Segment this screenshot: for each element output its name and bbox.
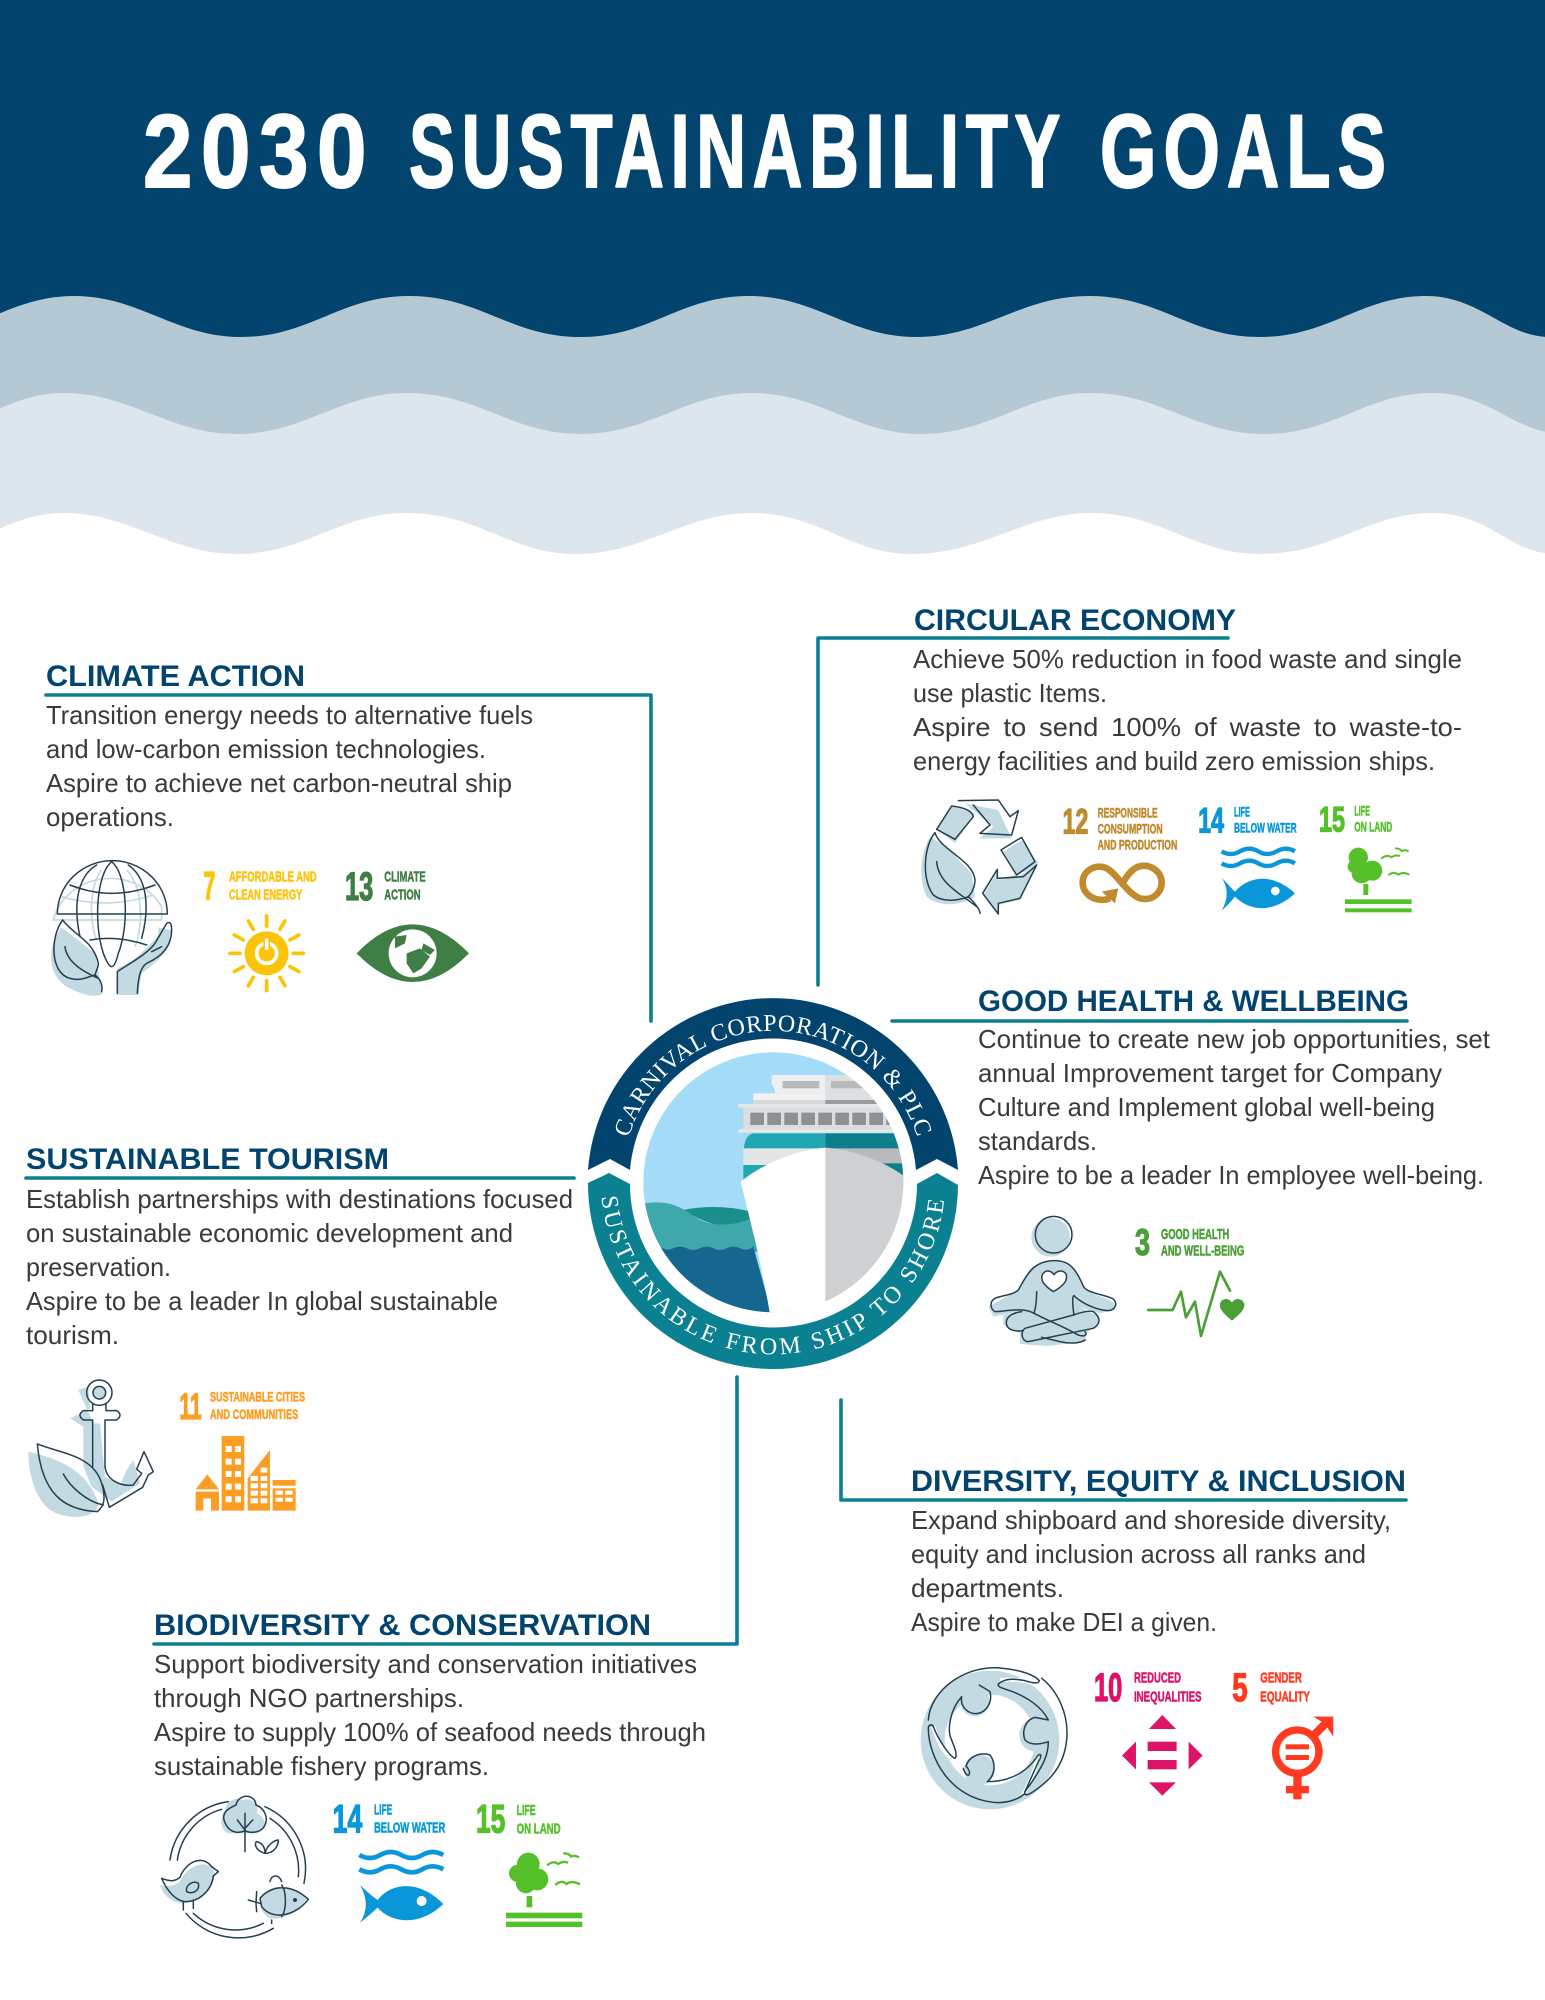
SDG 15 badge bbox=[476, 1798, 582, 1927]
title: GOALS bbox=[1100, 94, 1393, 210]
SDG 12 badge bbox=[1063, 802, 1177, 903]
text: sustainable tourism: preservation. bbox=[26, 1252, 171, 1282]
heading: climate action: CLIMATE ACTION bbox=[46, 660, 305, 693]
icon: globe in hands with leaf bbox=[51, 861, 172, 996]
connector: good health bbox=[892, 1019, 1407, 1023]
text: sustainable tourism: on sustainable economic development and bbox=[26, 1218, 513, 1248]
heading: sustainable tourism: SUSTAINABLE TOURISM bbox=[26, 1143, 389, 1176]
SDG 10 badge: INEQUALITIES bbox=[1134, 1689, 1202, 1705]
ribbon text: top: CARNIVAL CORPORATION & PLC bbox=[616, 1015, 932, 1136]
text: good health: Aspire to be a leader In employee well-being. bbox=[978, 1160, 1484, 1190]
text: good health bbox=[978, 1024, 1491, 1190]
SDG 11 badge: AND COMMUNITIES bbox=[210, 1407, 298, 1422]
heading: circular economy: CIRCULAR ECONOMY bbox=[914, 604, 1236, 637]
SDG 12 badge: AND PRODUCTION bbox=[1098, 837, 1177, 852]
text: circular economy: Achieve 50% reduction in food waste and single bbox=[913, 644, 1462, 674]
icon: anchor with leaf bbox=[28, 1380, 153, 1517]
SDG 14 badge: LIFE bbox=[374, 1802, 392, 1818]
SDG 15 badge: ON LAND bbox=[517, 1821, 561, 1837]
SDG 5 badge bbox=[1232, 1666, 1333, 1799]
SDG 5 badge: EQUALITY bbox=[1260, 1689, 1310, 1705]
SDG 15 badge bbox=[1319, 801, 1412, 912]
text: good health: Culture and Implement global well-being bbox=[978, 1092, 1435, 1122]
wave layer: pale blue bbox=[0, 393, 1545, 620]
text: diversity bbox=[911, 1505, 1391, 1637]
SDG 13 badge: ACTION bbox=[384, 888, 421, 904]
SDG 15 badge: 15 bbox=[476, 1798, 505, 1842]
SDG 15 badge: LIFE bbox=[1354, 803, 1370, 818]
text: sustainable tourism: tourism. bbox=[26, 1320, 119, 1350]
SDG 15 badge: 15 bbox=[1319, 801, 1345, 840]
SDG 10 badge: 10 bbox=[1094, 1666, 1122, 1710]
SDG 7 badge: 7 bbox=[203, 864, 215, 908]
text: sustainable tourism: Aspire to be a leader In global sustainable bbox=[26, 1286, 498, 1316]
SDG 5 badge: 5 bbox=[1232, 1666, 1248, 1710]
icon: meditating figure with heart bbox=[988, 1216, 1116, 1346]
text: circular economy: Aspire to send 100% of waste to waste-to- bbox=[913, 712, 1462, 742]
panel: diversity, equity and inclusion bbox=[911, 1465, 1406, 1803]
text: diversity: Aspire to make DEI a given. bbox=[911, 1607, 1217, 1637]
SDG 13 badge: CLIMATE bbox=[384, 869, 426, 885]
text: climate action bbox=[46, 700, 533, 832]
icons: diversity bbox=[928, 1666, 1333, 1803]
text: biodiversity: Aspire to supply 100% of seafood needs through bbox=[154, 1717, 706, 1747]
connector: biodiversity bbox=[154, 1377, 737, 1644]
ribbon text: bottom: SUSTAINABLE FROM SHIP TO SHORE bbox=[602, 1196, 944, 1354]
SDG 14 badge: 14 bbox=[333, 1798, 363, 1842]
text: biodiversity bbox=[154, 1649, 706, 1781]
ribbon: upper navy bbox=[588, 998, 958, 1170]
SDG 7 badge: CLEAN ENERGY bbox=[229, 888, 302, 904]
panel: good health and wellbeing bbox=[978, 985, 1491, 1346]
SDG 14 badge: LIFE bbox=[1234, 805, 1250, 820]
panel: biodiversity and conservation bbox=[154, 1609, 706, 1938]
title: SUSTAINABILITY bbox=[409, 94, 1067, 210]
logo: Carnival Corporation badge bbox=[588, 998, 958, 1369]
heading: diversity: DIVERSITY, EQUITY & INCLUSION bbox=[911, 1465, 1406, 1498]
text: sustainable tourism bbox=[26, 1184, 573, 1350]
SDG 14 badge bbox=[1198, 802, 1297, 911]
text: good health: annual Improvement target for Company bbox=[978, 1058, 1442, 1088]
text: circular economy: use plastic Items. bbox=[913, 678, 1107, 708]
panel: circular economy bbox=[913, 604, 1462, 915]
SDG 3 badge bbox=[1135, 1222, 1244, 1336]
connector: sustainable tourism bbox=[26, 1176, 574, 1180]
SDG 11 badge: 11 bbox=[179, 1385, 202, 1427]
connector: diversity bbox=[841, 1400, 1406, 1500]
text: good health: standards. bbox=[978, 1126, 1097, 1156]
SDG 14 badge bbox=[333, 1798, 446, 1923]
icons: good health bbox=[988, 1216, 1244, 1346]
title: 2030 bbox=[143, 94, 375, 210]
SDG 12 badge: RESPONSIBLE bbox=[1098, 805, 1158, 820]
panel: climate action bbox=[46, 660, 533, 996]
icon: recycling arrows with leaf bbox=[921, 800, 1038, 915]
SDG 3 badge: 3 bbox=[1135, 1222, 1150, 1263]
SDG 14 badge: BELOW WATER bbox=[1234, 821, 1297, 836]
SDG 7 badge: AFFORDABLE AND bbox=[229, 869, 317, 885]
text: climate action: Aspire to achieve net carbon-neutral ship bbox=[46, 768, 512, 798]
SDG 14 badge: BELOW WATER bbox=[374, 1821, 446, 1837]
text: circular economy bbox=[913, 644, 1462, 776]
heading: good health: GOOD HEALTH & WELLBEING bbox=[978, 985, 1409, 1018]
text: climate action: Transition energy needs to alternative fuels bbox=[46, 700, 533, 730]
SDG 15 badge: LIFE bbox=[517, 1803, 536, 1819]
heading: biodiversity: BIODIVERSITY & CONSERVATION bbox=[154, 1609, 651, 1642]
text: sustainable tourism: Establish partnerships with destinations focused bbox=[26, 1184, 573, 1214]
text: climate action: operations. bbox=[46, 802, 174, 832]
SDG 11 badge bbox=[179, 1385, 305, 1511]
ship illustration bbox=[637, 1047, 910, 1320]
SDG 12 badge: 12 bbox=[1063, 802, 1088, 841]
icon: tree, bird and fish cycle bbox=[160, 1796, 308, 1938]
wave layer: mid blue bbox=[0, 296, 1545, 600]
text: good health: Continue to create new job opportunities, set bbox=[978, 1024, 1491, 1054]
SDG 13 badge bbox=[345, 865, 469, 982]
SDG 3 badge: GOOD HEALTH bbox=[1161, 1227, 1229, 1243]
text: diversity: equity and inclusion across all ranks and bbox=[911, 1539, 1366, 1569]
icons: biodiversity bbox=[160, 1796, 582, 1938]
ribbon: lower teal bbox=[588, 1173, 958, 1369]
SDG 13 badge: 13 bbox=[345, 865, 373, 909]
text: climate action: and low-carbon emission technologies. bbox=[46, 734, 486, 764]
icons: climate action bbox=[51, 861, 469, 996]
header banner background bbox=[0, 0, 1545, 345]
wave layer: white bbox=[0, 513, 1545, 700]
connector: climate action bbox=[46, 695, 651, 1021]
SDG 10 badge bbox=[1094, 1666, 1203, 1796]
icon: circle of people bbox=[928, 1668, 1067, 1803]
SDG 5 badge: GENDER bbox=[1260, 1671, 1302, 1687]
SDG 14 badge: 14 bbox=[1198, 802, 1224, 841]
text: circular economy: energy facilities and build zero emission ships. bbox=[913, 746, 1435, 776]
SDG 15 badge: ON LAND bbox=[1354, 819, 1392, 834]
icons: sustainable tourism bbox=[28, 1380, 305, 1517]
text: diversity: Expand shipboard and shoreside diversity, bbox=[911, 1505, 1391, 1535]
SDG 12 badge: CONSUMPTION bbox=[1098, 821, 1163, 836]
text: diversity: departments. bbox=[911, 1573, 1064, 1603]
text: biodiversity: sustainable fishery programs. bbox=[154, 1751, 489, 1781]
text: biodiversity: through NGO partnerships. bbox=[154, 1683, 464, 1713]
SDG 10 badge: REDUCED bbox=[1134, 1671, 1181, 1687]
SDG 3 badge: AND WELL-BEING bbox=[1161, 1244, 1244, 1260]
SDG 11 badge: SUSTAINABLE CITIES bbox=[210, 1390, 305, 1405]
panel: sustainable tourism bbox=[26, 1143, 573, 1517]
connector: circular economy bbox=[818, 638, 1228, 985]
icons: circular economy bbox=[921, 800, 1412, 915]
SDG 7 badge bbox=[203, 864, 317, 991]
text: biodiversity: Support biodiversity and conservation initiatives bbox=[154, 1649, 697, 1679]
